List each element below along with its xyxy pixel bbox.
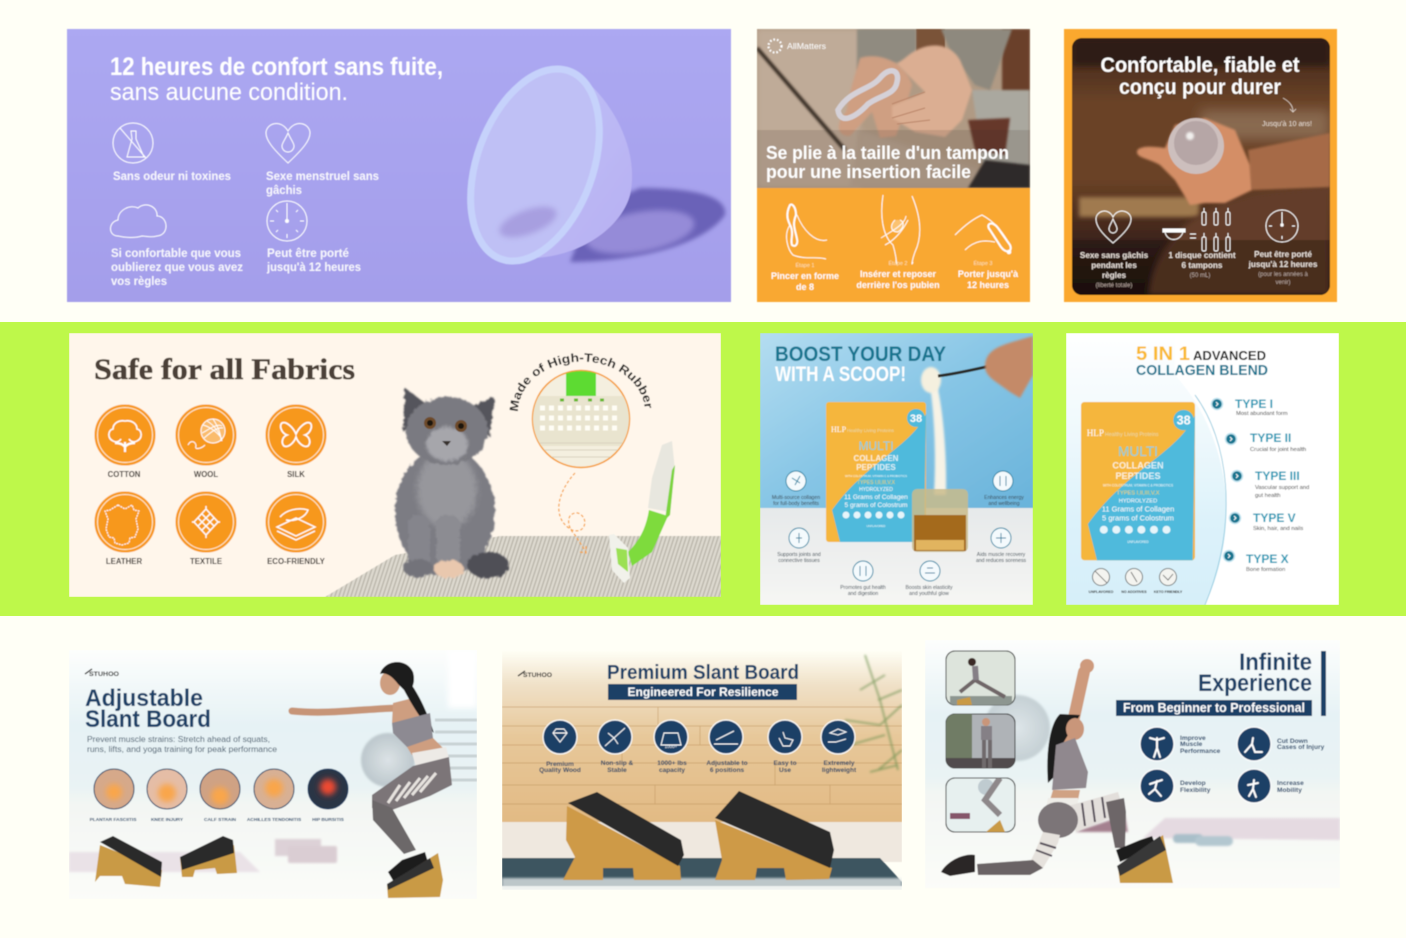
product bag: HLP — [1087, 428, 1104, 438]
heading — [85, 685, 211, 733]
panel: premium slant board: 1000+ — [665, 744, 678, 749]
exercise ball — [361, 733, 415, 787]
icon: cloud — [110, 205, 166, 238]
icon: no toxins flask — [113, 123, 153, 163]
benefit labels: Cut Down — [1277, 738, 1308, 745]
type descriptions: Vascular support and — [1255, 485, 1309, 491]
benefit labels: Supports joints and — [777, 552, 821, 558]
description: runs, lifts, and yoga training for peak performance — [87, 745, 278, 754]
callout: Jusqu'à 10 ans! — [1262, 121, 1312, 128]
product bag: UNFLAVORED — [867, 524, 885, 528]
collagen types: TYPE II — [1250, 431, 1291, 445]
benefit labels: Mobility — [1277, 787, 1302, 794]
brush — [609, 441, 675, 583]
icon: heart with drop — [266, 123, 310, 163]
fabric labels: WOOL — [194, 470, 218, 479]
icon: silk butterfly — [281, 423, 311, 446]
injury labels — [90, 817, 345, 823]
benefit labels: Improve — [1180, 735, 1206, 742]
feature labels: 6 positions — [710, 767, 745, 774]
benefit labels: Develop — [1180, 780, 1206, 787]
product bag — [826, 402, 926, 542]
product bag: 38 — [1177, 414, 1191, 428]
woman lunging on slant board — [941, 659, 1173, 883]
heading: Premium Slant Board — [607, 662, 799, 684]
panel heading — [110, 53, 443, 106]
benefit labels: Performance — [1180, 748, 1221, 755]
feature labels: 1 disque contient — [1168, 251, 1236, 260]
product bag: PEPTIDES — [856, 463, 896, 472]
icon: insertion step — [881, 195, 920, 264]
icon: wear step — [955, 215, 1011, 254]
scoop and powder — [921, 366, 990, 495]
green band — [0, 322, 1406, 616]
feature labels: Peut être porté — [1254, 250, 1312, 259]
step descriptions: 12 heures — [967, 280, 1009, 290]
collagen types — [1235, 397, 1300, 566]
icon: 12 hour clock — [267, 201, 307, 241]
heading: 5 IN 1 — [1136, 344, 1190, 365]
product bag: 5 grams of Colostrum — [844, 502, 908, 509]
panel heading: sans aucune condition. — [110, 79, 348, 106]
kitten — [395, 388, 509, 578]
feature labels: Adjustable to — [706, 760, 748, 767]
product bag: MULTI — [858, 439, 894, 453]
type descriptions: gut health — [1255, 493, 1280, 499]
injury labels: HIP BURSITIS — [312, 817, 345, 823]
heading: Adjustable — [85, 685, 203, 712]
badge labels: KETO FRIENDLY — [1154, 590, 1183, 594]
heading: Slant Board — [85, 706, 211, 733]
feature labels: Easy to — [773, 760, 797, 767]
heading — [1198, 649, 1312, 697]
benefit labels: for full-body benefits — [773, 501, 819, 507]
benefit labels: and reduces soreness — [976, 558, 1027, 564]
benefit labels: connective tissues — [778, 558, 820, 564]
icon: 12 hour clock — [1266, 210, 1298, 242]
icon: disc equals tampons — [1163, 208, 1230, 251]
collagen types: TYPE X — [1246, 552, 1289, 566]
benefit icons — [1140, 727, 1271, 803]
feature labels — [539, 760, 857, 774]
logo: STUHOO — [89, 671, 119, 678]
feature labels: vos règles — [111, 274, 167, 288]
arrow — [1283, 98, 1296, 112]
product bag — [1081, 402, 1195, 560]
step labels — [796, 260, 992, 269]
photo headline: pour une insertion facile — [766, 162, 971, 182]
benefit figures — [1149, 738, 1262, 797]
step labels: Étape 2 — [889, 260, 907, 267]
feature labels — [1080, 250, 1318, 280]
product bag: HLP — [831, 425, 847, 434]
photo headline — [766, 143, 1009, 182]
step labels: Étape 3 — [974, 260, 992, 267]
product bag: Healthy Living Proteins — [1105, 432, 1159, 438]
panel: safe for all fabrics — [69, 333, 721, 597]
product bag: 11 Grams of Collagen — [844, 494, 908, 501]
feature labels: Sans odeur ni toxines — [113, 169, 231, 183]
benefit labels: Increase — [1277, 780, 1304, 787]
feature icons — [543, 720, 855, 754]
subheading banner — [608, 684, 797, 700]
injury labels: CALF STRAIN — [204, 817, 237, 823]
feature labels: Premium — [546, 761, 574, 768]
feature notes — [1096, 272, 1309, 289]
photo: hand holding disc — [1072, 38, 1330, 295]
heading: Infinite — [1239, 649, 1312, 676]
fabric labels: TEXTILE — [190, 557, 222, 566]
dashed arrow — [559, 473, 586, 553]
feature labels: oublierez que vous avez — [111, 260, 243, 274]
feature labels: lightweight — [822, 767, 857, 774]
fabric labels: COTTON — [108, 470, 141, 479]
logo — [85, 669, 119, 678]
logo: STUHOO — [523, 672, 552, 679]
benefit labels: Cases of Injury — [1277, 744, 1325, 751]
photo: hands folding cup — [757, 29, 1030, 188]
plant — [845, 655, 902, 772]
fabric labels — [106, 470, 326, 566]
headline: conçu pour durer — [1119, 76, 1281, 99]
description — [87, 735, 278, 754]
icon: cotton — [109, 421, 141, 452]
heading: BOOST YOUR DAY — [775, 343, 946, 366]
icon: leather hide — [105, 505, 139, 545]
feature labels: jusqu'à 12 heures — [266, 260, 361, 274]
feature glyphs — [553, 728, 846, 746]
feature labels — [111, 169, 379, 288]
kitten face — [424, 417, 467, 446]
yoga mat and blocks — [69, 839, 337, 872]
heading: ADVANCED — [1193, 348, 1266, 363]
injury labels: ACHILLES TENDONITIS — [247, 817, 302, 823]
benefit labels — [772, 495, 1027, 597]
heading: COLLAGEN BLEND — [1136, 362, 1268, 379]
injury labels: PLANTAR FASCIITIS — [90, 817, 137, 823]
benefit labels: Promotes gut health — [840, 585, 886, 591]
carpet — [325, 536, 721, 597]
icon: AllMatters logo — [768, 40, 782, 52]
benefit labels — [1180, 735, 1325, 794]
feature notes: (50 mL) — [1190, 273, 1210, 279]
type descriptions — [1236, 411, 1309, 573]
benefit labels: and youthful glow — [909, 591, 949, 597]
type descriptions: Skin, hair, and nails — [1253, 526, 1303, 532]
badge labels: UNFLAVORED — [1089, 590, 1114, 594]
headline — [1100, 54, 1300, 99]
feature notes: venir) — [1275, 280, 1291, 286]
feature labels: jusqu'à 12 heures — [1248, 260, 1318, 269]
product bag: COLLAGEN — [854, 454, 899, 463]
panel: boost your day — [760, 333, 1033, 605]
panel: premium slant board — [502, 650, 902, 890]
feature labels: 6 tampons — [1182, 261, 1223, 270]
benefit labels: Boosts skin elasticity — [906, 585, 953, 591]
icon: textile weave — [192, 506, 220, 538]
collagen types: TYPE III — [1255, 469, 1300, 483]
photo headline: Se plie à la taille d'un tampon — [766, 143, 1009, 163]
feature labels: Quality Wood — [539, 767, 581, 774]
step descriptions — [771, 269, 1019, 292]
heading: Safe for all Fabrics — [94, 353, 355, 386]
product bag: TYPES I,II,III,V,X — [1116, 491, 1160, 497]
pain spots — [106, 779, 336, 805]
feature labels: gâchis — [266, 183, 302, 197]
step descriptions: Insérer et reposer — [860, 269, 937, 279]
type descriptions: Most abundant form — [1236, 411, 1288, 417]
type descriptions: Bone formation — [1246, 567, 1285, 573]
step descriptions: de 8 — [796, 282, 814, 292]
product bag: WITH COLOSTRUM, VITAMIN C & PROBIOTICS — [1103, 484, 1173, 488]
feature labels: Non-slip & — [601, 760, 634, 767]
fabric badges — [95, 405, 326, 552]
icon: pinch step — [787, 204, 827, 259]
panel: collagen blend — [1066, 333, 1339, 605]
feature labels: 1000+ lbs — [657, 760, 687, 767]
injury labels: KNEE INJURY — [151, 817, 184, 823]
feature notes: (pour les années à — [1258, 272, 1309, 278]
product bag: TYPES I,II,III,V,X — [857, 480, 896, 486]
benefit labels: Flexibility — [1180, 787, 1211, 794]
product bag: UNFLAVORED — [1127, 540, 1149, 544]
icon: heart with drop — [1096, 211, 1131, 243]
panel: boost your day: WITH A SCOOP! — [775, 363, 906, 386]
hand — [985, 336, 1033, 398]
product bag: 11 Grams of Collagen — [1102, 505, 1174, 514]
slant boards — [563, 791, 834, 880]
icon: eco layers — [277, 509, 315, 540]
heading: Experience — [1198, 670, 1312, 697]
product bag: 5 grams of Colostrum — [1102, 514, 1174, 523]
accent bar — [1321, 651, 1326, 716]
step descriptions: Porter jusqu'à — [958, 269, 1019, 279]
icon: wool — [188, 419, 225, 449]
badge labels: NO ADDITIVES — [1121, 590, 1147, 594]
fabric labels: ECO-FRIENDLY — [267, 557, 326, 566]
benefit labels: Muscle — [1180, 741, 1203, 748]
product bag: 38 — [910, 413, 922, 425]
product bag: COLLAGEN — [1112, 461, 1164, 471]
product bag: HYDROLYZED — [859, 487, 893, 493]
headline: Confortable, fiable et — [1100, 54, 1300, 77]
exercise ball — [984, 695, 1050, 761]
woman squatting — [292, 662, 452, 898]
product bag: PEPTIDES — [1115, 471, 1161, 481]
step labels: Étape 1 — [796, 262, 814, 269]
panel: adjustable slant board — [69, 650, 477, 899]
badges — [1092, 568, 1176, 586]
feature labels: Sexe sans gâchis — [1080, 251, 1149, 260]
panel heading: 12 heures de confort sans fuite, — [110, 53, 443, 81]
floor props — [1075, 815, 1340, 846]
magnified rubber detail — [532, 370, 630, 468]
benefit labels: and digestion — [848, 591, 878, 597]
badge labels — [1088, 590, 1182, 594]
type descriptions: Crucial for joint health — [1250, 447, 1306, 453]
fabric labels: SILK — [287, 470, 305, 479]
benefit icons — [786, 471, 1013, 581]
feature labels: Si confortable que vous — [111, 246, 241, 260]
collagen types: TYPE I — [1235, 397, 1273, 411]
panel: durable disc — [1064, 29, 1337, 302]
benefit labels: Multi-source collagen — [772, 495, 820, 501]
benefit labels: Aids muscle recovery — [977, 552, 1026, 558]
subheading banner: From Beginner to Professional — [1123, 701, 1305, 715]
thumbnails — [946, 651, 1015, 832]
feature labels: pendant les — [1091, 261, 1137, 270]
benefit labels: and wellbeing — [988, 501, 1020, 507]
feature labels: Stable — [607, 767, 627, 774]
slant boards — [95, 836, 237, 887]
feature labels: capacity — [659, 767, 685, 774]
arc label: Made of High-Tech Rubber — [509, 352, 652, 412]
glass — [912, 489, 968, 552]
collagen types: TYPE V — [1253, 511, 1296, 525]
subheading banner: Engineered For Resilience — [628, 685, 779, 699]
feature notes: (liberté totale) — [1096, 283, 1132, 289]
feature labels: règles — [1102, 271, 1127, 280]
feature labels: Peut être porté — [267, 246, 349, 260]
benefit labels: Enhances energy — [984, 495, 1024, 501]
injury circles — [94, 769, 348, 809]
feature labels: Sexe menstruel sans — [266, 169, 379, 183]
product bag: WITH COLOSTRUM, VITAMIN C & PROBIOTICS — [845, 474, 907, 478]
panel: AllMatters steps — [757, 29, 1030, 302]
fabric labels: LEATHER — [106, 557, 142, 566]
timeline dots — [1212, 398, 1242, 562]
step descriptions: Pincer en forme — [771, 271, 839, 281]
product bag: HYDROLYZED — [1119, 499, 1157, 505]
product bag: MULTI — [1118, 444, 1158, 459]
feature labels: Use — [779, 767, 791, 774]
product bag: Healthy Living Proteins — [847, 428, 895, 433]
description: Prevent muscle strains: Stretch ahead of squats, — [87, 735, 270, 744]
step descriptions: derrière l'os pubien — [856, 280, 940, 290]
heading — [1136, 346, 1268, 376]
panel: infinite experience — [925, 640, 1340, 888]
feature labels: Extremely — [823, 760, 855, 767]
brand name: AllMatters — [787, 42, 826, 51]
panel: comfort cup — [67, 29, 731, 302]
